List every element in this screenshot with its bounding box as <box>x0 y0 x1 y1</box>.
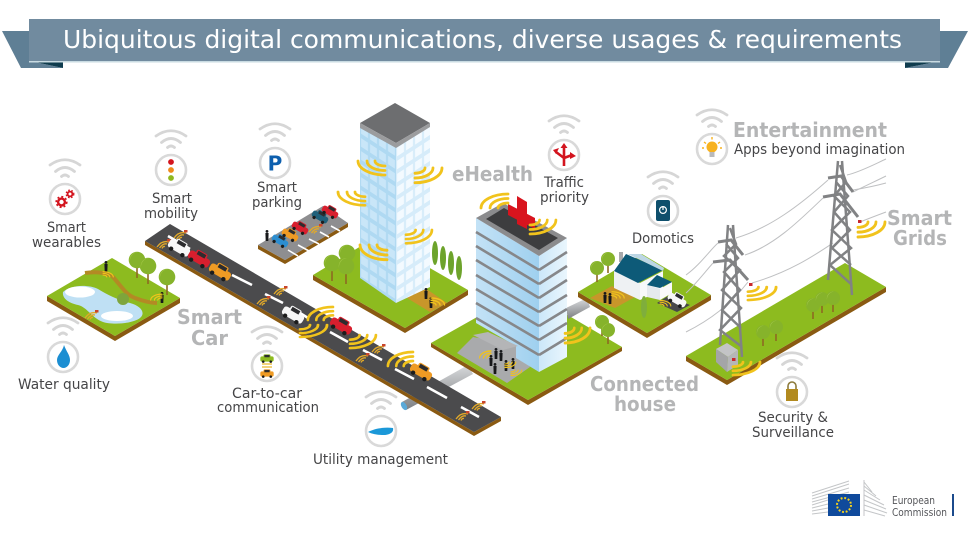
labels: usages: Smart <box>152 191 192 207</box>
labels: usages: Water quality <box>18 377 110 393</box>
icon: traffic priority <box>549 116 579 170</box>
labels: grey category headings: Grids <box>893 226 947 250</box>
labels: usages: mobility <box>144 206 198 222</box>
power lines <box>686 159 886 332</box>
labels: usages: priority <box>540 190 589 206</box>
house island <box>578 252 711 338</box>
utility box and grid signals <box>716 220 885 375</box>
labels: grey category headings: Smart <box>887 206 952 230</box>
icon: utility management <box>366 392 396 446</box>
smart grid island <box>686 263 886 385</box>
labels: grey category headings <box>177 118 952 416</box>
labels: usages: Apps beyond imagination <box>734 142 905 158</box>
power tower left <box>713 225 748 357</box>
icon: smart wearables <box>50 160 80 214</box>
road with cars <box>145 224 501 436</box>
pipe under road <box>399 365 473 411</box>
labels: usages: Car-to-car <box>232 386 302 402</box>
icon: entertainment <box>697 110 727 164</box>
icon: car-to-car <box>252 327 282 381</box>
European Commission logo: Commission <box>892 507 947 519</box>
office tower <box>338 103 444 308</box>
power tower right <box>823 161 858 295</box>
icon: smart parking: P <box>268 152 282 176</box>
pond island <box>47 252 180 341</box>
labels: usages <box>18 142 905 468</box>
labels: grey category headings: Entertainment <box>733 118 887 142</box>
parking lot <box>258 202 348 264</box>
office tower island <box>313 237 468 333</box>
labels: usages: Smart <box>47 220 86 236</box>
icon: smart mobility <box>156 131 186 185</box>
labels: usages: Traffic <box>543 175 584 191</box>
hospital island <box>431 290 622 405</box>
labels: grey category headings: house <box>614 392 676 416</box>
labels: usages: Smart <box>257 180 297 196</box>
labels: grey category headings: Car <box>191 326 228 350</box>
icon: water quality <box>48 318 78 372</box>
European Commission logo: European <box>892 495 935 507</box>
labels: grey category headings: Connected <box>590 372 699 396</box>
European Commission logo <box>812 480 954 519</box>
title banner: Ubiquitous digital communications, diverse usages & requirements <box>63 25 902 54</box>
labels: usages: wearables <box>32 235 101 251</box>
title banner <box>2 19 968 68</box>
labels: usages: Utility management <box>313 452 448 468</box>
labels: grey category headings: Smart <box>177 305 242 329</box>
icon: smart parking <box>260 124 290 178</box>
labels: usages: Security & <box>758 410 828 426</box>
labels: usages: Surveillance <box>752 425 834 441</box>
hospital building <box>473 194 590 376</box>
icon: security <box>777 353 807 407</box>
labels: grey category headings: eHealth <box>452 162 533 186</box>
labels: usages: parking <box>252 195 302 211</box>
icon: domotics <box>648 172 678 226</box>
labels: usages: Domotics <box>632 231 694 247</box>
labels: usages: communication <box>217 400 319 416</box>
